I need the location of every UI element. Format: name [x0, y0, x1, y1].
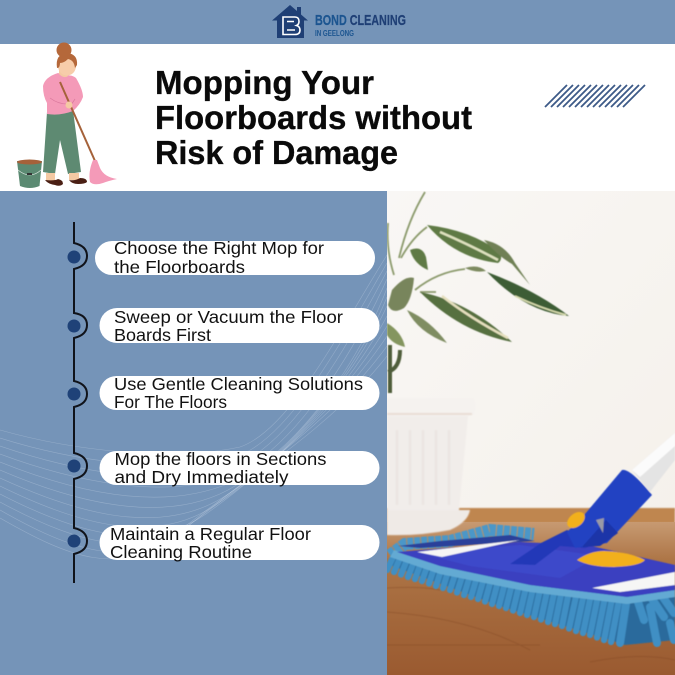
timeline dot 5: [68, 534, 80, 548]
yellow button: [564, 509, 588, 531]
step 4: and Dry Immediately: [114, 467, 289, 487]
leaf right stripe: [515, 296, 566, 315]
floor board lines: [388, 587, 524, 646]
connector: [511, 529, 588, 565]
step 4: [100, 449, 380, 487]
photo: flat mop on wooden floor: [387, 191, 675, 675]
plant stems: [388, 192, 465, 292]
leaf cluster: [388, 278, 414, 311]
mop edge band: [390, 550, 675, 604]
step 3: [100, 374, 380, 412]
title line 1: Mopping Your: [155, 65, 374, 102]
hair: [57, 53, 77, 68]
leaf descending: [407, 310, 447, 343]
arm line: [50, 98, 75, 105]
step 2: [100, 307, 380, 345]
socket shade: [582, 520, 618, 547]
step 1: [95, 238, 375, 277]
decorative wave lines: [0, 255, 387, 559]
pot rim: [387, 398, 476, 416]
step 3: For The Floors: [114, 392, 227, 412]
skirting board: [387, 508, 675, 523]
panel: blue steps background: [0, 191, 387, 675]
title: [155, 65, 472, 172]
handle socket: [567, 470, 652, 548]
front fringe strands: [387, 555, 620, 642]
header band: [0, 0, 675, 44]
white handle: [632, 433, 675, 492]
handle highlight: [632, 433, 675, 477]
logo wordmark: BOND CLEANING: [315, 12, 406, 29]
flower pot: [387, 412, 472, 536]
illustration: woman mopping with bucket: [17, 42, 117, 188]
white pad left: [417, 540, 520, 557]
pot ribs: [397, 430, 449, 505]
bucket: [17, 160, 42, 188]
leaf small top: [410, 249, 428, 270]
face: [58, 56, 76, 76]
step 3: Use Gentle Cleaning Solutions: [114, 374, 363, 394]
logo: Bond Cleaning in Geelong: [272, 5, 406, 38]
mop head plate: [397, 542, 675, 597]
fringe shadow: [390, 552, 675, 645]
leaf upper: [427, 225, 501, 263]
leaf lower: [420, 292, 512, 342]
logo tagline: IN GEELONG: [315, 28, 354, 38]
icon: house with letter B: [272, 5, 308, 38]
title line 2: Floorboards without: [155, 100, 472, 137]
hair bun: [56, 42, 72, 58]
leaf upper stripe: [440, 232, 498, 260]
yellow pedal: [577, 551, 645, 567]
pot body: [387, 507, 460, 511]
leaf small: [465, 267, 486, 272]
hand: [66, 102, 72, 108]
step 4: Mop the floors in Sections: [114, 449, 327, 469]
stem base: [388, 345, 400, 393]
socket slot: [596, 518, 604, 533]
wall: [387, 191, 675, 511]
pot rim shadow: [387, 413, 472, 415]
mop: [387, 433, 675, 645]
step 2: Sweep or Vacuum the Floor: [114, 307, 343, 327]
timeline spine: [74, 222, 87, 583]
big fringe strands right: [620, 587, 674, 643]
wooden floor: [387, 522, 675, 675]
back fringe: [390, 530, 534, 555]
step 2: Boards First: [114, 325, 211, 345]
timeline dot 1: [68, 250, 80, 264]
step 5: Cleaning Routine: [110, 542, 252, 562]
neck: [59, 70, 68, 77]
ankles: [46, 173, 79, 181]
leaf lower stripe: [442, 296, 508, 338]
back fringe shadow: [398, 535, 535, 548]
mop stick: [60, 82, 95, 161]
leaf back: [484, 240, 530, 285]
timeline dot 3: [68, 388, 80, 400]
leaf bottom left: [387, 323, 405, 347]
mop head: [89, 160, 117, 184]
decorative hatch: [545, 85, 645, 107]
shoes: [45, 178, 87, 186]
saucer: [387, 510, 470, 535]
legs: [43, 110, 81, 174]
title line 3: Risk of Damage: [155, 135, 398, 172]
step 1: Choose the Right Mop for: [114, 238, 324, 258]
white pad right: [592, 572, 675, 592]
plant: [387, 192, 569, 393]
leaf right: [487, 272, 569, 316]
timeline dot 4: [68, 460, 80, 472]
torso: [43, 73, 83, 115]
step 5: Maintain a Regular Floor: [110, 524, 311, 544]
timeline dot 2: [68, 320, 80, 332]
timeline: [68, 222, 87, 583]
plate shade: [440, 546, 585, 577]
step 1: the Floorboards: [114, 257, 245, 277]
step 5: [100, 524, 380, 562]
